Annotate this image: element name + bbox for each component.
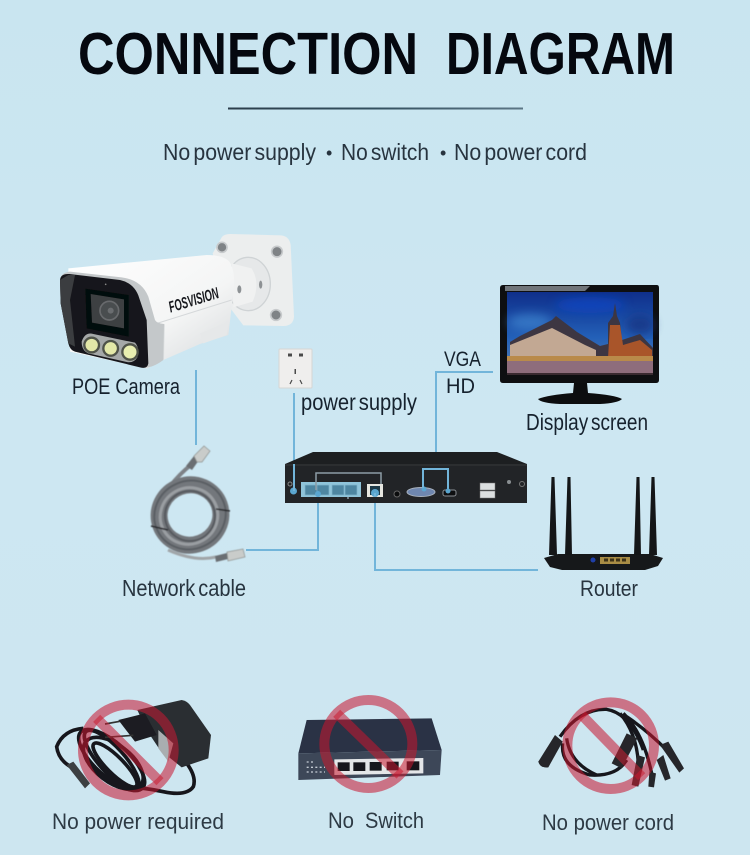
connection lines xyxy=(196,370,538,570)
HDMI port xyxy=(443,490,456,496)
label: No Switch: No xyxy=(328,808,354,833)
camera wall mount xyxy=(213,234,294,326)
title divider rule xyxy=(228,108,523,110)
icon: power adapter crossed out xyxy=(57,700,211,800)
label: HD: HD xyxy=(446,375,475,398)
prohibition sign xyxy=(324,700,412,788)
camera LED lights xyxy=(82,334,138,362)
icon: wall socket xyxy=(279,349,312,388)
PoE ports xyxy=(301,473,381,499)
prohibition sign xyxy=(567,702,654,789)
subtitle: • xyxy=(440,143,446,163)
label: POE Camera: POE Camera xyxy=(72,374,181,399)
monitor stand xyxy=(538,383,622,404)
monitor frame xyxy=(500,285,659,383)
label: power supply: power supply xyxy=(301,389,417,415)
subtitle: No power cord xyxy=(454,139,587,165)
LAN port xyxy=(367,484,383,497)
prohibition sign xyxy=(83,705,174,795)
VGA port xyxy=(407,486,435,496)
title: DIAGRAM xyxy=(446,21,675,87)
camera body xyxy=(68,255,234,368)
power port xyxy=(290,488,297,494)
icon: splitter power cord crossed out xyxy=(538,702,684,789)
switch casing xyxy=(298,718,442,753)
icon: network switch crossed out xyxy=(298,700,442,788)
label: Router: Router xyxy=(580,576,638,601)
label: No Switch: Switch xyxy=(365,808,424,833)
icon: router xyxy=(544,477,663,570)
subtitle xyxy=(163,139,587,165)
audio port xyxy=(394,491,400,497)
title xyxy=(78,21,675,87)
adapter DC plug xyxy=(67,762,90,788)
monitor picture xyxy=(507,292,654,375)
adapter body xyxy=(137,700,211,767)
camera brand: FOSVISION xyxy=(167,285,221,316)
connector overlay lines on the NVR xyxy=(294,464,448,497)
icon: POE camera xyxy=(60,234,294,368)
subtitle: No power supply xyxy=(163,139,316,165)
adapter cable xyxy=(57,720,194,800)
label: Network cable: Network cable xyxy=(122,575,246,601)
cord connectors xyxy=(538,733,684,787)
cord wires xyxy=(560,709,667,775)
label: VGA: VGA xyxy=(444,348,481,371)
icon: network cable xyxy=(143,446,245,562)
camera lens window xyxy=(85,289,129,337)
subtitle: No switch xyxy=(341,139,429,165)
camera dark face xyxy=(60,272,164,367)
label: Display screen: Display screen xyxy=(526,409,648,435)
label: No Switch xyxy=(328,808,424,833)
icon: display screen xyxy=(500,285,659,404)
USB ports xyxy=(480,483,495,498)
switch ports xyxy=(334,758,423,775)
title: CONNECTION xyxy=(78,21,418,87)
label: No power required: No power required xyxy=(52,809,224,834)
subtitle: • xyxy=(326,143,332,163)
label: No power cord: No power cord xyxy=(542,810,674,835)
icon: NVR recorder xyxy=(285,452,527,503)
